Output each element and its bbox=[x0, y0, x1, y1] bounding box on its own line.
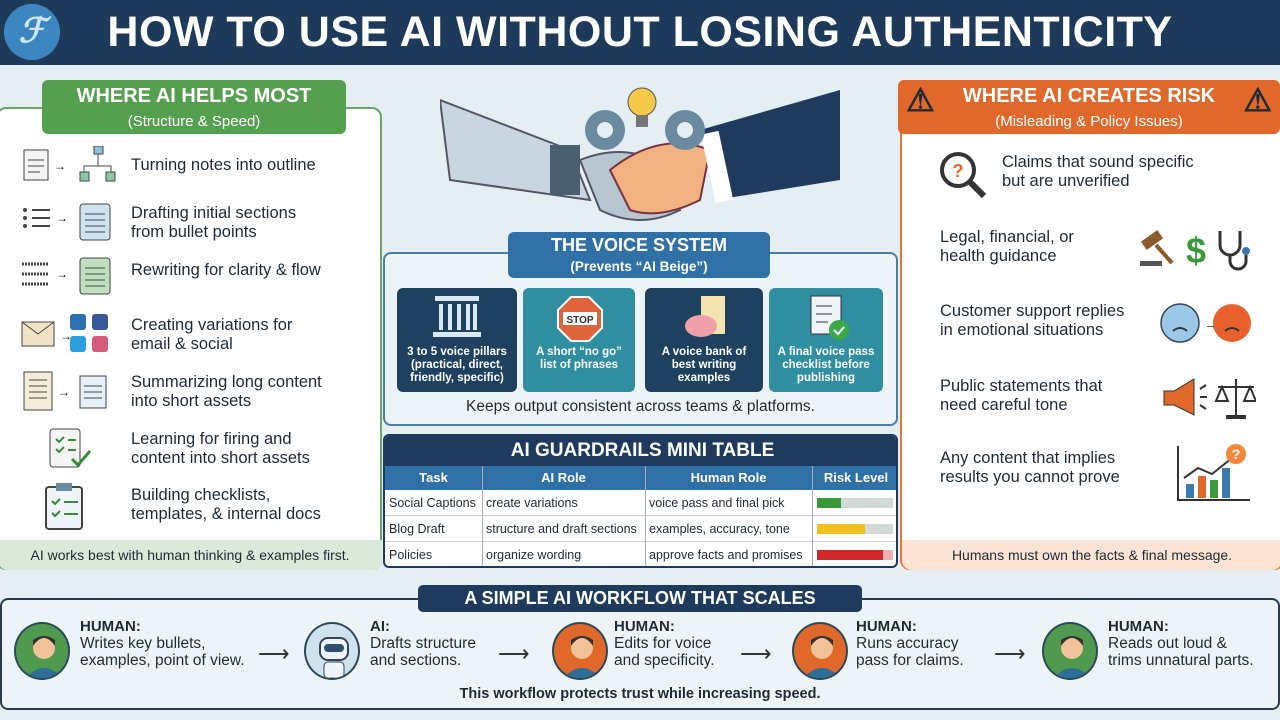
card: voice bank: best writing bbox=[672, 359, 736, 371]
table: AI guardrails mini table: Risk Level bbox=[824, 470, 888, 485]
step 4: human accuracy: pass for claims. bbox=[856, 652, 964, 669]
step 3: human edits: HUMAN: bbox=[614, 618, 675, 635]
item: unverified claims: but are unverified bbox=[1002, 172, 1130, 190]
panel: where AI creates risk bbox=[898, 80, 1280, 570]
card: voice pillars bbox=[397, 288, 517, 392]
item: checklists: templates, & internal docs bbox=[131, 505, 321, 523]
footer: helps most bbox=[0, 540, 382, 570]
card: no go list bbox=[523, 288, 635, 392]
footer: creates risk: Humans must own the facts & final message. bbox=[952, 547, 1232, 563]
step 5: human reads aloud: trims unnatural parts. bbox=[1108, 652, 1254, 669]
step 2: AI drafts: AI: bbox=[370, 618, 390, 635]
step 3: human edits: Edits for voice bbox=[614, 635, 711, 652]
table: AI guardrails mini table: Policies bbox=[389, 548, 432, 562]
heading: workflow bbox=[418, 585, 862, 612]
footer: helps most: AI works best with human thinking & examples first. bbox=[30, 547, 350, 563]
heading: helps most bbox=[42, 80, 346, 134]
text: keeps output consistent: Keeps output consistent across teams & platforms. bbox=[466, 398, 815, 415]
step 1: human writes: examples, point of view. bbox=[80, 652, 245, 669]
card: final pass checklist: publishing bbox=[797, 372, 855, 384]
card: no go list: STOP bbox=[566, 315, 594, 326]
arrow: ⟶ bbox=[258, 641, 290, 666]
heading: creates risk: ⚠ bbox=[1243, 82, 1272, 118]
footer text: workflow: This workflow protects trust while increasing speed. bbox=[460, 686, 820, 702]
step 5: human reads aloud: Reads out loud & bbox=[1108, 635, 1227, 652]
arrow: ⟶ bbox=[740, 641, 772, 666]
item: summarizing bbox=[24, 372, 322, 410]
illustration: handshake bbox=[440, 88, 840, 221]
item: customer support: Customer support replies bbox=[940, 302, 1124, 320]
card: voice bank: A voice bank of bbox=[662, 346, 746, 358]
card: voice bank bbox=[645, 288, 763, 392]
footer: creates risk bbox=[902, 540, 1280, 570]
heading: creates risk bbox=[898, 80, 1280, 134]
heading: voice system: THE VOICE SYSTEM bbox=[551, 235, 727, 255]
item: notes to outline bbox=[24, 146, 316, 182]
card: final pass checklist bbox=[769, 288, 883, 392]
item: customer support bbox=[940, 302, 1251, 343]
table: AI guardrails mini table: approve facts and promises bbox=[649, 548, 803, 562]
step 5: human reads aloud bbox=[1042, 618, 1254, 680]
card: no go list: A short “no go” bbox=[536, 346, 622, 358]
heading: voice system: (Prevents “AI Beige”) bbox=[570, 259, 708, 274]
heading: helps most: (Structure & Speed) bbox=[128, 113, 260, 130]
heading: creates risk: ⚠ bbox=[906, 82, 935, 118]
item: checklists bbox=[45, 483, 321, 530]
item: learning: Learning for firing and bbox=[131, 430, 292, 448]
heading: creates risk: WHERE AI CREATES RISK bbox=[963, 85, 1215, 107]
item: rewriting: → bbox=[56, 267, 68, 281]
item: unprovable results: Any content that implies bbox=[940, 449, 1115, 467]
item: rewriting: Rewriting for clarity & flow bbox=[131, 261, 321, 279]
step 4: human accuracy bbox=[792, 618, 964, 680]
card: voice pillars: (practical, direct, bbox=[411, 359, 503, 371]
table: AI guardrails mini table: AI GUARDRAILS MINI TABLE bbox=[511, 440, 774, 461]
panel: where AI helps most bbox=[0, 80, 382, 570]
item: learning bbox=[50, 428, 310, 468]
table: AI guardrails mini table: Task bbox=[419, 470, 448, 485]
card: final pass checklist: A final voice pass bbox=[778, 346, 874, 358]
item: notes to outline: → bbox=[54, 159, 66, 173]
heading: helps most: WHERE AI HELPS MOST bbox=[77, 85, 311, 107]
item: legal financial health: Legal, financial, or bbox=[940, 228, 1074, 246]
step 3: human edits: and specificity. bbox=[614, 652, 715, 669]
heading: creates risk: (Misleading & Policy Issues) bbox=[995, 113, 1183, 130]
table: AI guardrails mini table: organize wording bbox=[486, 548, 581, 562]
item: legal financial health bbox=[940, 228, 1250, 271]
step 2: AI drafts bbox=[304, 618, 476, 680]
step 1: human writes: Writes key bullets, bbox=[80, 635, 205, 652]
title: HOW TO USE AI WITHOUT LOSING AUTHENTICITY bbox=[107, 8, 1173, 56]
panel: the voice system bbox=[383, 232, 898, 426]
table: AI guardrails mini table: create variations bbox=[486, 496, 578, 510]
item: summarizing: Summarizing long content bbox=[131, 373, 322, 391]
item: summarizing: → bbox=[58, 385, 70, 399]
step 4: human accuracy: HUMAN: bbox=[856, 618, 917, 635]
table: AI guardrails mini table bbox=[383, 434, 898, 568]
item: unprovable results: ? bbox=[1232, 446, 1240, 462]
card: voice pillars: friendly, specific) bbox=[410, 372, 504, 384]
item: checklists: Building checklists, bbox=[131, 486, 270, 504]
step 5: human reads aloud: HUMAN: bbox=[1108, 618, 1169, 635]
arrow: ⟶ bbox=[498, 641, 530, 666]
table: AI guardrails mini table: examples, accuracy, tone bbox=[649, 522, 790, 536]
header bar bbox=[0, 0, 1280, 65]
item: customer support: → bbox=[1204, 316, 1218, 332]
table: AI guardrails mini table: voice pass and final pick bbox=[649, 496, 784, 510]
table: AI guardrails mini table: Blog Draft bbox=[389, 522, 445, 536]
item: notes to outline: Turning notes into outline bbox=[131, 156, 316, 174]
logo bbox=[4, 4, 60, 60]
item: legal financial health: health guidance bbox=[940, 247, 1057, 265]
item: variations: email & social bbox=[131, 335, 233, 353]
step 2: AI drafts: Drafts structure bbox=[370, 635, 476, 652]
item: drafting: from bullet points bbox=[131, 223, 257, 241]
step 4: human accuracy: Runs accuracy bbox=[856, 635, 959, 652]
item: drafting: Drafting initial sections bbox=[131, 204, 296, 222]
heading: workflow: A SIMPLE AI WORKFLOW THAT SCALES bbox=[464, 588, 816, 608]
card: final pass checklist: checklist before bbox=[782, 359, 870, 371]
step 3: human edits bbox=[552, 618, 715, 680]
item: drafting: → bbox=[56, 211, 68, 225]
table: AI guardrails mini table: Social Captions bbox=[389, 496, 476, 510]
item: unprovable results bbox=[940, 444, 1250, 501]
card: voice bank: examples bbox=[678, 372, 730, 384]
item: drafting bbox=[23, 204, 296, 241]
item: variations bbox=[22, 314, 292, 353]
step 2: AI drafts: and sections. bbox=[370, 652, 461, 669]
item: learning: content into short assets bbox=[131, 449, 310, 467]
item: summarizing: into short assets bbox=[131, 392, 251, 410]
item: unprovable results: results you cannot prove bbox=[940, 468, 1120, 486]
heading: voice system bbox=[508, 232, 770, 278]
item: legal financial health: $ bbox=[1186, 230, 1206, 271]
panel: simple AI workflow bbox=[0, 585, 1280, 710]
item: public statements bbox=[940, 377, 1256, 419]
item: rewriting bbox=[22, 258, 321, 294]
logo: ℱ bbox=[19, 13, 45, 50]
item: unverified claims bbox=[940, 152, 1194, 198]
item: variations: → bbox=[60, 329, 72, 343]
item: public statements: Public statements that bbox=[940, 377, 1102, 395]
item: customer support: in emotional situations bbox=[940, 321, 1103, 339]
step 1: human writes bbox=[14, 618, 245, 680]
table: AI guardrails mini table: AI Role bbox=[541, 470, 586, 485]
item: variations: Creating variations for bbox=[131, 316, 292, 334]
table: AI guardrails mini table: Human Role bbox=[691, 470, 766, 485]
item: unverified claims: Claims that sound specific bbox=[1002, 153, 1194, 171]
card: voice pillars: 3 to 5 voice pillars bbox=[407, 346, 507, 358]
step 1: human writes: HUMAN: bbox=[80, 618, 141, 635]
item: public statements: need careful tone bbox=[940, 396, 1068, 414]
card: no go list: list of phrases bbox=[540, 359, 618, 371]
arrow: ⟶ bbox=[994, 641, 1026, 666]
item: unverified claims: ? bbox=[952, 161, 964, 181]
table: AI guardrails mini table: structure and draft sections bbox=[486, 522, 637, 536]
